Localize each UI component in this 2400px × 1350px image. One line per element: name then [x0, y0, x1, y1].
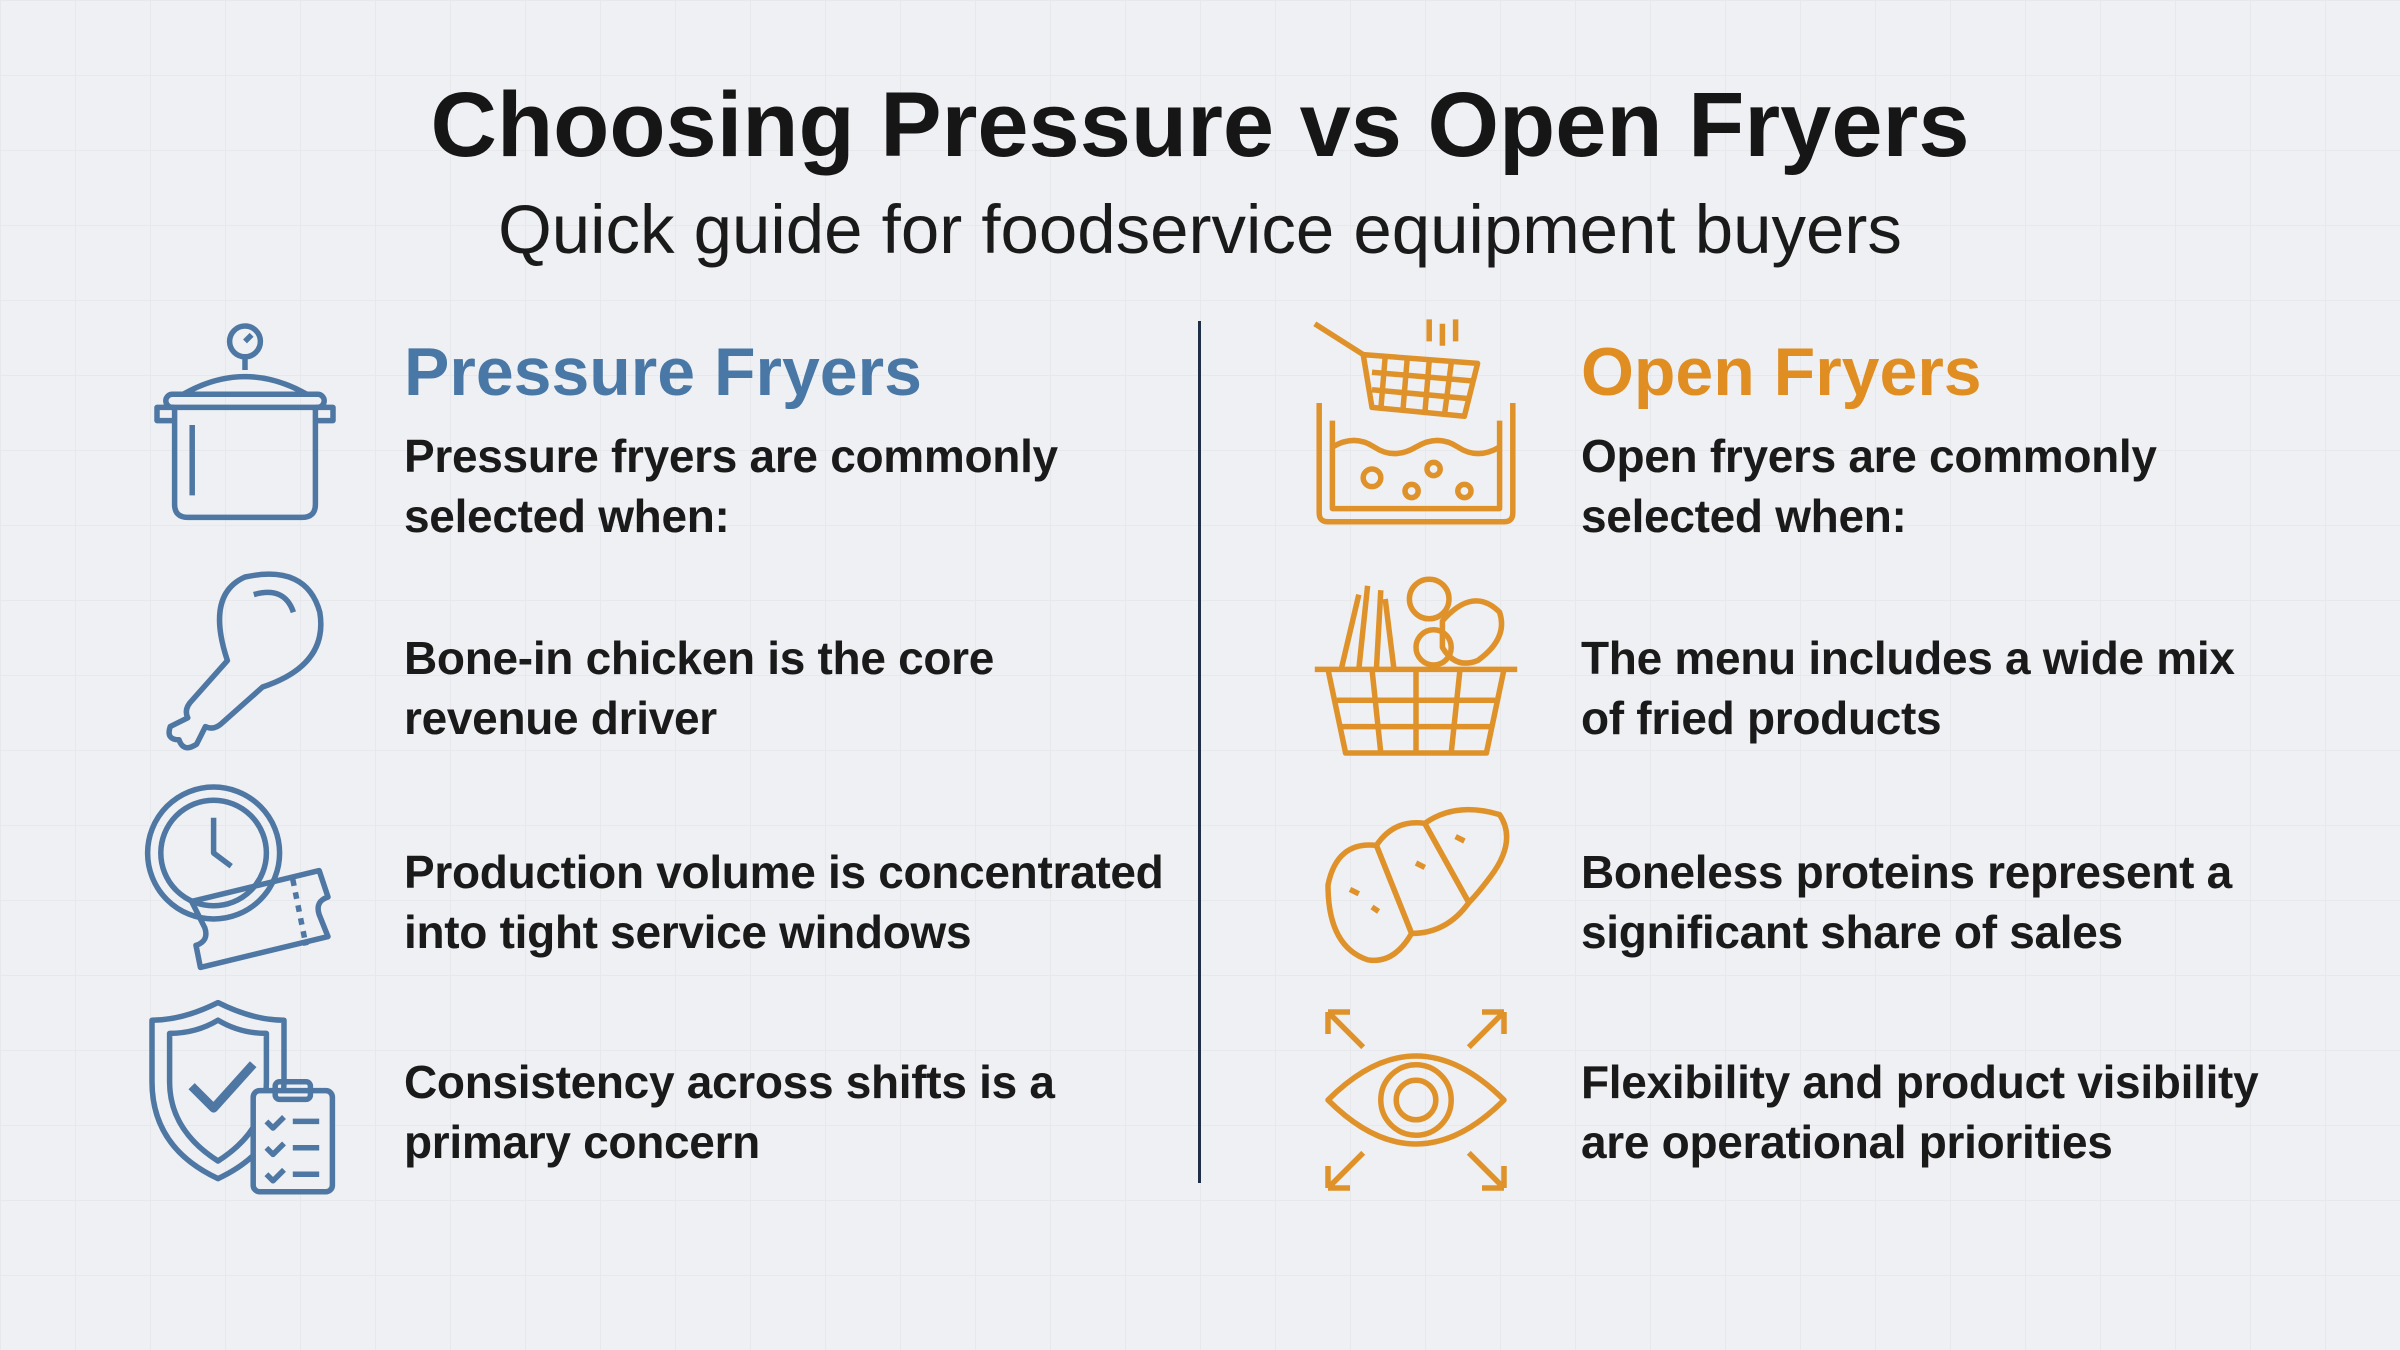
- item 1 text: [1581, 632, 2235, 744]
- intro text: selected when:: [1581, 490, 1907, 542]
- item 3 text: Flexibility and product visibility: [1581, 1056, 2258, 1108]
- item 3 text: [404, 1056, 1056, 1168]
- item 2 text: [1581, 846, 2232, 958]
- heading: pressure fryers: Pressure Fryers: [404, 334, 922, 410]
- icon: fryer basket in oil: [1313, 319, 1516, 524]
- icon: pressure cooker: [154, 323, 336, 520]
- item 2 text: into tight service windows: [404, 906, 971, 958]
- icon: chicken breasts: [1325, 806, 1510, 964]
- subtitle: Quick guide for foodservice equipment buyers: [498, 191, 1902, 268]
- icon: shield and clipboard: [149, 1000, 336, 1194]
- item 2 text: Production volume is concentrated: [404, 846, 1163, 898]
- item 1 text: revenue driver: [404, 692, 717, 744]
- item 1 text: The menu includes a wide mix: [1581, 632, 2235, 684]
- intro text: [404, 430, 1058, 542]
- item 2 text: Boneless proteins represent a: [1581, 846, 2232, 898]
- panel: open fryers: [1313, 319, 2258, 1191]
- item 3 text: [1581, 1056, 2258, 1168]
- item 2 text: [404, 846, 1163, 958]
- item 3 text: Consistency across shifts is a: [404, 1056, 1055, 1108]
- icon: clock and ticket: [144, 784, 331, 970]
- heading: open fryers: Open Fryers: [1581, 334, 1982, 410]
- icon: drumstick: [166, 571, 324, 750]
- intro text: [1581, 430, 2157, 542]
- item 1 text: Bone-in chicken is the core: [404, 632, 994, 684]
- intro text: selected when:: [404, 490, 730, 542]
- item 3 text: are operational priorities: [1581, 1116, 2113, 1168]
- intro text: Open fryers are commonly: [1581, 430, 2157, 482]
- icon: mixed food basket: [1314, 576, 1518, 756]
- item 3 text: primary concern: [404, 1116, 760, 1168]
- divider: [1198, 321, 1201, 1183]
- item 1 text: of fried products: [1581, 692, 1941, 744]
- item 1 text: [404, 632, 994, 744]
- panel: pressure fryers: [144, 323, 1163, 1194]
- icon: eye with arrows: [1325, 1009, 1507, 1191]
- intro text: Pressure fryers are commonly: [404, 430, 1058, 482]
- title: Choosing Pressure vs Open Fryers: [430, 74, 1969, 176]
- item 2 text: significant share of sales: [1581, 906, 2123, 958]
